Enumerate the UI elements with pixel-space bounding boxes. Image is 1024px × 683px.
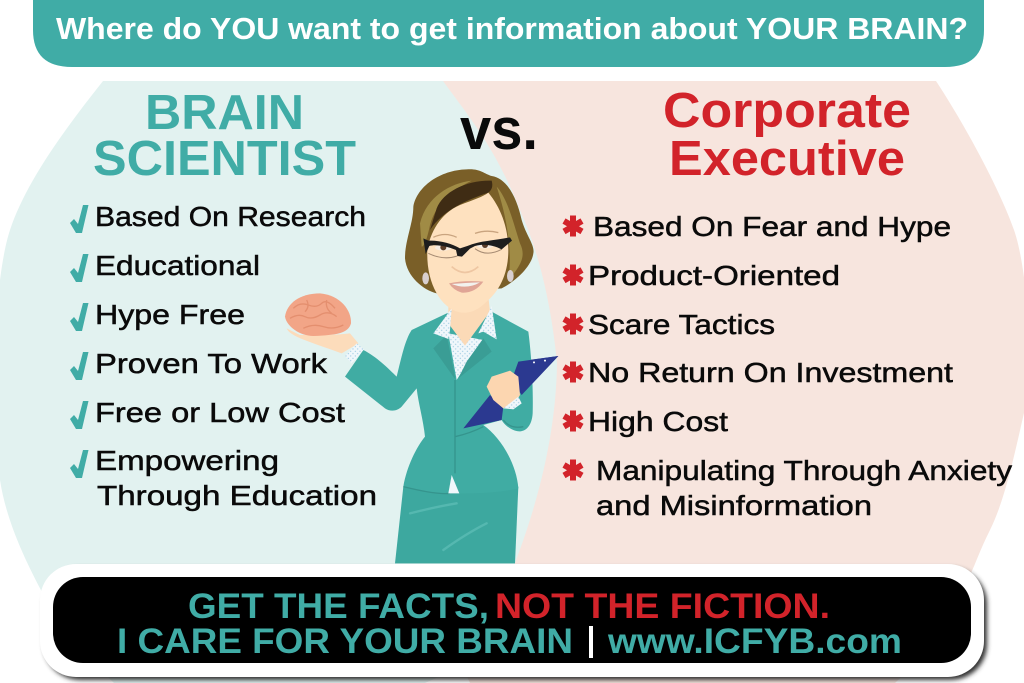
footer banner xyxy=(40,564,987,680)
heading: brain scientist: BRAIN xyxy=(145,86,304,140)
footer line two: I CARE FOR YOUR BRAIN xyxy=(117,622,573,661)
footer black panel xyxy=(53,577,971,663)
benefit labels: Free or Low Cost xyxy=(95,397,345,428)
benefit labels: Based On Research xyxy=(95,201,366,232)
benefit labels: Educational xyxy=(95,250,260,281)
footer line one xyxy=(188,587,830,626)
drawback labels: Manipulating Through Anxiety xyxy=(596,455,1012,486)
eyebrows xyxy=(433,231,498,237)
neck xyxy=(448,297,490,346)
body and props xyxy=(285,293,558,563)
hair xyxy=(405,169,534,293)
heading: versus: vs. xyxy=(460,97,538,162)
earrings xyxy=(422,270,514,284)
list: corporate executive drawbacks xyxy=(564,211,1012,521)
heading: corporate executive: Executive xyxy=(669,132,905,186)
drawback labels: High Cost xyxy=(588,406,728,437)
benefit labels: Through Education xyxy=(97,480,377,511)
clipboard holes xyxy=(533,360,546,363)
drawback labels: and Misinformation xyxy=(596,490,872,521)
footer line one: NOT THE FICTION. xyxy=(495,587,830,626)
glasses xyxy=(423,237,512,257)
glasses lower rims xyxy=(428,249,502,258)
footer line two: www.ICFYB.com xyxy=(607,622,902,661)
benefit labels: Empowering xyxy=(95,445,279,476)
sleeve cuff right xyxy=(503,397,522,409)
illustration: woman holding a brain and clipboard xyxy=(285,169,558,563)
benefit labels: Hype Free xyxy=(95,299,245,330)
clipboard xyxy=(463,356,558,428)
heading: corporate executive xyxy=(663,84,911,186)
drawback labels: No Return On Investment xyxy=(588,357,953,388)
footer line two xyxy=(117,622,902,661)
footer divider xyxy=(589,626,593,658)
heading: corporate executive: Corporate xyxy=(663,84,911,138)
icon: brain xyxy=(285,293,351,336)
jacket shading xyxy=(403,380,523,494)
drawback labels: Based On Fear and Hype xyxy=(593,211,951,242)
panel: corporate executive background xyxy=(430,81,1024,683)
benefit labels: Proven To Work xyxy=(95,348,328,379)
list: brain scientist benefits xyxy=(70,201,377,511)
asterisk icons xyxy=(564,216,582,480)
drawback labels: Scare Tactics xyxy=(588,309,775,340)
shirt front xyxy=(448,333,483,380)
hand on clipboard xyxy=(487,371,520,408)
skirt xyxy=(395,487,518,563)
footer outline with shadow xyxy=(44,568,987,680)
title: Where do YOU want to get information about YOUR BRAIN? xyxy=(56,11,968,46)
check marks xyxy=(70,205,88,478)
footer line one: GET THE FACTS, xyxy=(188,587,489,626)
teeth xyxy=(452,282,480,287)
holding hand xyxy=(287,328,358,353)
hair highlights xyxy=(420,181,523,280)
lapels xyxy=(433,335,492,380)
collar xyxy=(433,306,497,339)
sleeve cuff left xyxy=(345,343,364,363)
panel: brain scientist background xyxy=(0,81,557,683)
eyes xyxy=(435,242,493,251)
hair parting shadow xyxy=(430,181,492,230)
heading: brain scientist: SCIENTIST xyxy=(93,132,356,186)
mouth xyxy=(449,281,483,293)
nose shading xyxy=(452,267,478,272)
shirt hem xyxy=(448,475,459,493)
drawback labels xyxy=(588,211,1012,521)
clipboard tip xyxy=(512,356,558,395)
drawback labels: Product-Oriented xyxy=(588,260,840,291)
jacket xyxy=(345,312,533,493)
face xyxy=(427,193,508,313)
clipboard front edge xyxy=(463,395,503,428)
header banner xyxy=(33,0,984,67)
skirt shading xyxy=(410,503,487,550)
heading: brain scientist xyxy=(93,86,356,186)
head xyxy=(405,169,534,313)
benefit labels xyxy=(95,201,377,511)
